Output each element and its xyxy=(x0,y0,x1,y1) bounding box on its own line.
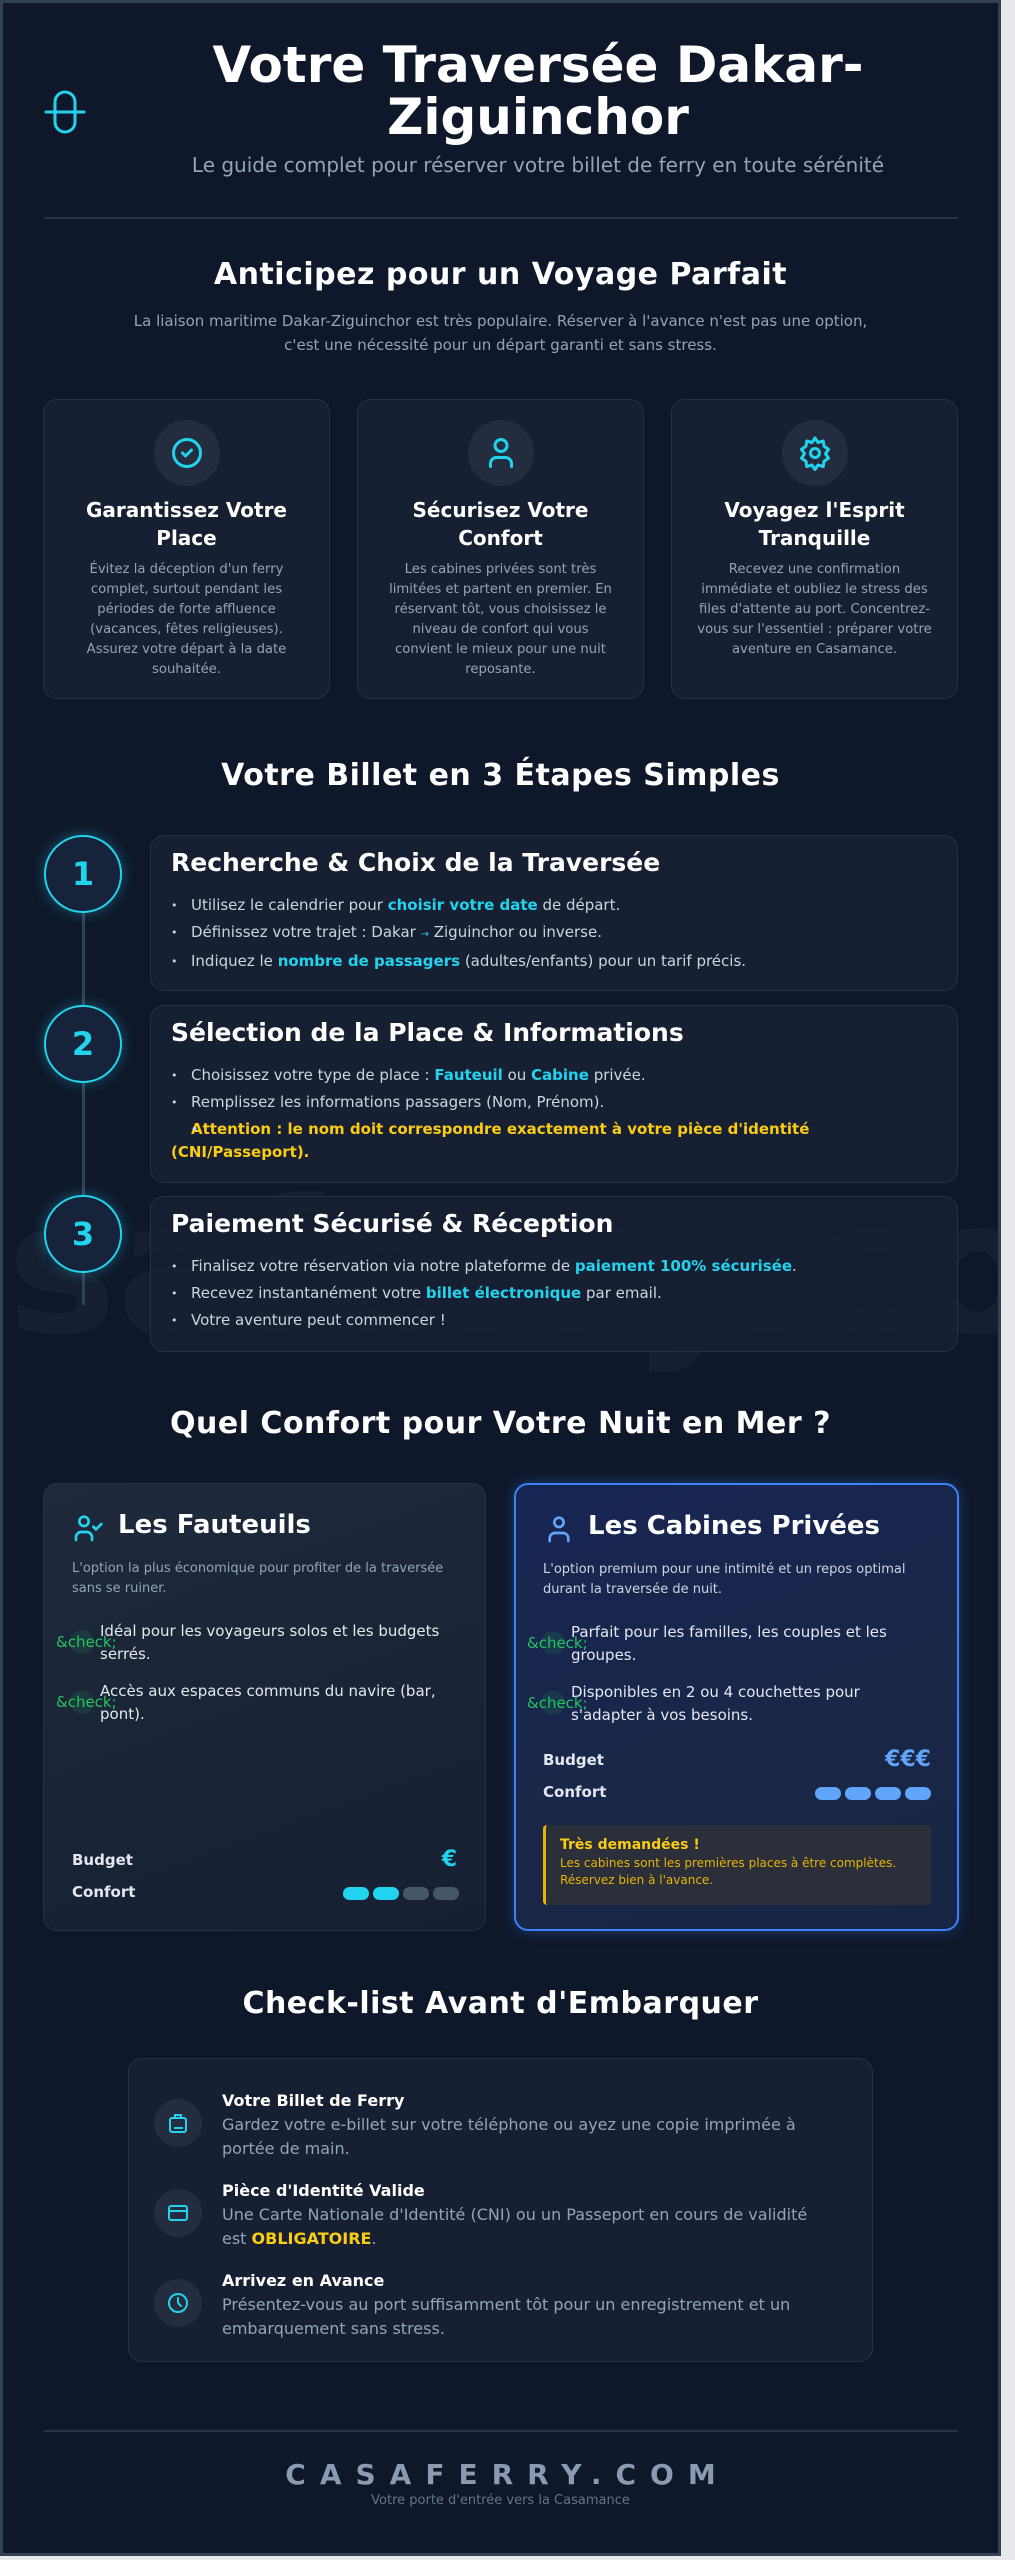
footer tagline: Votre porte d'entrée vers la Casamance xyxy=(371,2493,630,2508)
step 1 card: Définissez votre trajet : Dakar → Ziguinchor ou inverse. xyxy=(191,923,602,941)
step 2 number xyxy=(44,1005,122,1083)
subtitle: Le guide complet pour réserver votre billet de ferry en toute sérénité xyxy=(192,153,884,177)
timeline line xyxy=(82,903,85,1305)
step 2 card: Choisissez votre type de place : Fauteuil ou Cabine privée. xyxy=(191,1066,646,1084)
intro paragraph: c'est une nécessité pour un départ garanti et sans stress. xyxy=(284,336,717,354)
panel: check-list: Une Carte Nationale d'Identité (CNI) ou un Passeport en cours de validité xyxy=(222,2205,807,2224)
title xyxy=(212,36,864,146)
panel: voyagez: Tranquille xyxy=(759,526,870,550)
callout: très demandées: Réservez bien à l'avance. xyxy=(560,1873,713,1887)
panel: check-list: Gardez votre e-billet sur votre téléphone ou ayez une copie imprimée à portée de main. xyxy=(222,2115,796,2158)
panel: sécurisez: Sécurisez Votre xyxy=(413,498,588,522)
panel: garantissez: Évitez la déception d'un ferry complet, surtout pendant les périodes de forte affluence (vacances, fêtes religieuses). Assurez votre départ à la date souhaitée. xyxy=(87,562,286,677)
step 3 card: Votre aventure peut commencer ! xyxy=(191,1311,446,1329)
panel: voyagez: Recevez une confirmation immédiate et oubliez le stress des files d'attente au port. Concentrez-vous sur l'essentiel : préparer votre aventure en Casamance. xyxy=(697,562,932,657)
icon: user xyxy=(548,1516,570,1542)
callout: très demandées xyxy=(543,1825,931,1905)
step 1 card: Recherche & Choix de la Traversée xyxy=(171,848,660,877)
step 2 card: Remplissez les informations passagers (Nom, Prénom). xyxy=(191,1093,604,1111)
intro paragraph xyxy=(134,312,867,354)
panel: garantissez xyxy=(43,399,330,699)
panel: sécurisez: Confort xyxy=(458,526,543,550)
step 3 card xyxy=(150,1196,958,1352)
panel: fauteuils: Confort xyxy=(72,1883,135,1901)
step 1 card: Indiquez le nombre de passagers (adultes/enfants) pour un tarif précis. xyxy=(191,952,746,970)
icon: clock xyxy=(154,2279,202,2327)
panel: cabines: &check; xyxy=(527,1634,588,1652)
panel: garantissez: Place xyxy=(156,526,217,550)
panel: cabines: L'option premium pour une intimité et un repos optimal durant la traversée de nuit. xyxy=(543,1562,905,1597)
icon: ticket xyxy=(154,2099,202,2147)
icon: user check xyxy=(74,1515,103,1542)
callout: très demandées: Très demandées ! xyxy=(560,1837,700,1853)
panel: cabines xyxy=(514,1483,959,1931)
panel: check-list: Arrivez en Avance xyxy=(222,2271,384,2290)
panel: check-list: Votre Billet de Ferry xyxy=(222,2091,404,2110)
icon: gear xyxy=(782,420,848,486)
step 1 card: Utilisez le calendrier pour choisir votre date de départ. xyxy=(191,896,620,914)
step 3 card: Paiement Sécurisé & Réception xyxy=(171,1209,613,1238)
panel: cabines: €€€ xyxy=(885,1747,931,1772)
panel: cabines: Parfait pour les familles, les couples et les groupes. xyxy=(571,1623,887,1664)
panel: cabines: Les Cabines Privées xyxy=(588,1511,880,1541)
panel: fauteuils: &check; xyxy=(56,1693,117,1711)
heading: anticipez: Anticipez pour un Voyage Parfait xyxy=(214,257,787,292)
title: Ziguinchor xyxy=(387,88,689,146)
panel: cabines: Budget xyxy=(543,1751,604,1769)
callout: très demandées: Les cabines sont les premières places à être complètes. xyxy=(560,1856,896,1870)
heading: check-list: Check-list Avant d'Embarquer xyxy=(242,1986,759,2021)
step 2 card: Attention : le nom doit correspondre exactement à votre pièce d'identité (CNI/Passeport). xyxy=(171,1120,809,1161)
panel: voyagez xyxy=(671,399,958,699)
panel: cabines: Confort xyxy=(543,1783,606,1801)
panel: cabines: &check; xyxy=(527,1694,588,1712)
panel: fauteuils: L'option la plus économique pour profiter de la traversée sans se ruiner. xyxy=(72,1561,443,1596)
step 3 card: Finalisez votre réservation via notre plateforme de paiement 100% sécurisée. xyxy=(191,1257,797,1275)
panel: cabines: Disponibles en 2 ou 4 couchettes pour s'adapter à vos besoins. xyxy=(571,1683,860,1724)
step 3 card: Recevez instantanément votre billet électronique par email. xyxy=(191,1284,662,1302)
panel: fauteuils: Budget xyxy=(72,1851,133,1869)
step 3 number: 3 xyxy=(72,1215,94,1253)
step 2 number: 2 xyxy=(72,1025,94,1063)
title: Votre Traversée Dakar- xyxy=(212,36,864,94)
panel: check-list xyxy=(128,2058,873,2362)
panel: fauteuils xyxy=(43,1483,486,1931)
panel: sécurisez xyxy=(357,399,644,699)
intro paragraph: La liaison maritime Dakar-Ziguinchor est très populaire. Réserver à l'avance n'est pas une option, xyxy=(134,312,867,330)
panel: sécurisez: Les cabines privées sont très limitées et partent en premier. En réservant tôt, vous choisissez le niveau de confort qui vous convient le mieux pour une nuit reposante. xyxy=(389,562,612,677)
icon: id card xyxy=(154,2189,202,2237)
icon: header logo xyxy=(44,90,86,134)
footer brand: CASAFERRY.COM xyxy=(285,2458,730,2491)
panel: fauteuils: &check; xyxy=(56,1633,117,1651)
step 1 card xyxy=(150,835,958,991)
heading: confort: Quel Confort pour Votre Nuit en Mer ? xyxy=(170,1406,831,1441)
panel: garantissez: Garantissez Votre xyxy=(86,498,287,522)
step 1 number xyxy=(44,835,122,913)
step 3 number xyxy=(44,1195,122,1273)
panel: voyagez: Voyagez l'Esprit xyxy=(724,498,905,522)
panel: fauteuils: Idéal pour les voyageurs solos et les budgets serrés. xyxy=(100,1622,439,1663)
step 1 number: 1 xyxy=(72,855,94,893)
heading: étapes: Votre Billet en 3 Étapes Simples xyxy=(221,758,780,793)
icon: user xyxy=(468,420,534,486)
panel: check-list: est OBLIGATOIRE. xyxy=(222,2229,377,2248)
panel: check-list: Présentez-vous au port suffisamment tôt pour un enregistrement et un embarquement sans stress. xyxy=(222,2295,790,2338)
icon: check circle xyxy=(154,420,220,486)
step 2 card xyxy=(150,1005,958,1183)
step 2 card: Sélection de la Place & Informations xyxy=(171,1018,684,1047)
panel: fauteuils: € xyxy=(442,1847,457,1872)
panel: check-list: Pièce d'Identité Valide xyxy=(222,2181,425,2200)
panel: fauteuils: Accès aux espaces communs du navire (bar, pont). xyxy=(100,1682,436,1723)
panel: fauteuils: Les Fauteuils xyxy=(118,1510,311,1540)
